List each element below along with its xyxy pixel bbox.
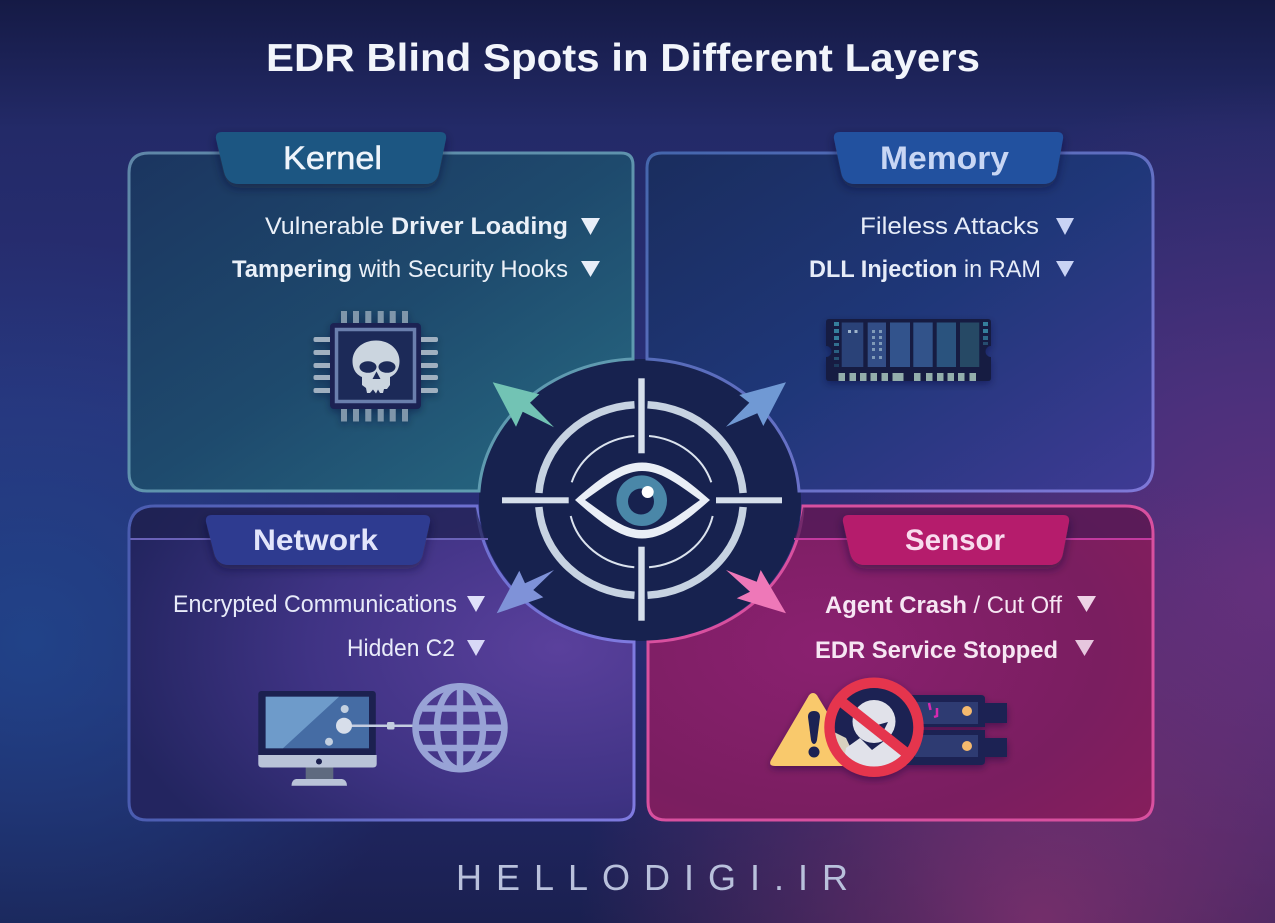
central target with eye [502,378,782,621]
panel: kernel [129,132,633,491]
kernel item 2: Tampering with Security Hooks [232,256,568,283]
eye outline [575,462,710,538]
network item 2: Hidden C2 [347,635,455,662]
memory item 1: Fileless Attacks [860,213,1039,240]
network item 1: Encrypted Communications [173,591,457,618]
title: EDR Blind Spots in Different Layers [266,37,980,80]
arrow: to sensor [726,570,786,613]
icon: monitor connected to globe [258,686,504,786]
sensor item 1: Agent Crash / Cut Off [825,592,1062,619]
icon: chip with skull [314,311,438,422]
kernel item 1: Vulnerable Driver Loading [265,213,568,240]
sensor tab [843,515,1069,565]
memory item 2: DLL Injection in RAM [809,256,1041,283]
footer brand: HELLODIGI.IR [456,857,848,898]
icon: warning, blocked agent and server [770,683,1007,772]
memory heading: Memory [880,140,1009,176]
panel: sensor [648,506,1153,820]
pupil [628,488,654,514]
memory panel background [647,153,1153,491]
arrow: to memory [726,382,786,427]
network tab [206,515,430,565]
outer ring [539,405,743,595]
network heading: Network [253,524,378,557]
memory tab [834,132,1063,184]
crosshair [502,378,782,621]
kernel tab [216,132,446,184]
sensor item 2: EDR Service Stopped [815,637,1058,664]
arrow: to kernel [493,382,554,427]
kernel heading: Kernel [283,140,382,176]
iris [616,475,667,526]
central hub backdrop [479,359,801,641]
network panel background [129,506,634,820]
inner ring [571,436,713,567]
arrow: to network [497,570,554,613]
sensor panel background [648,506,1153,820]
sensor heading: Sensor [905,524,1005,557]
kernel panel background [129,153,633,491]
panel: memory [647,132,1153,491]
icon: RAM module [826,319,991,381]
eye highlight [642,486,654,498]
panel: network [129,506,634,820]
